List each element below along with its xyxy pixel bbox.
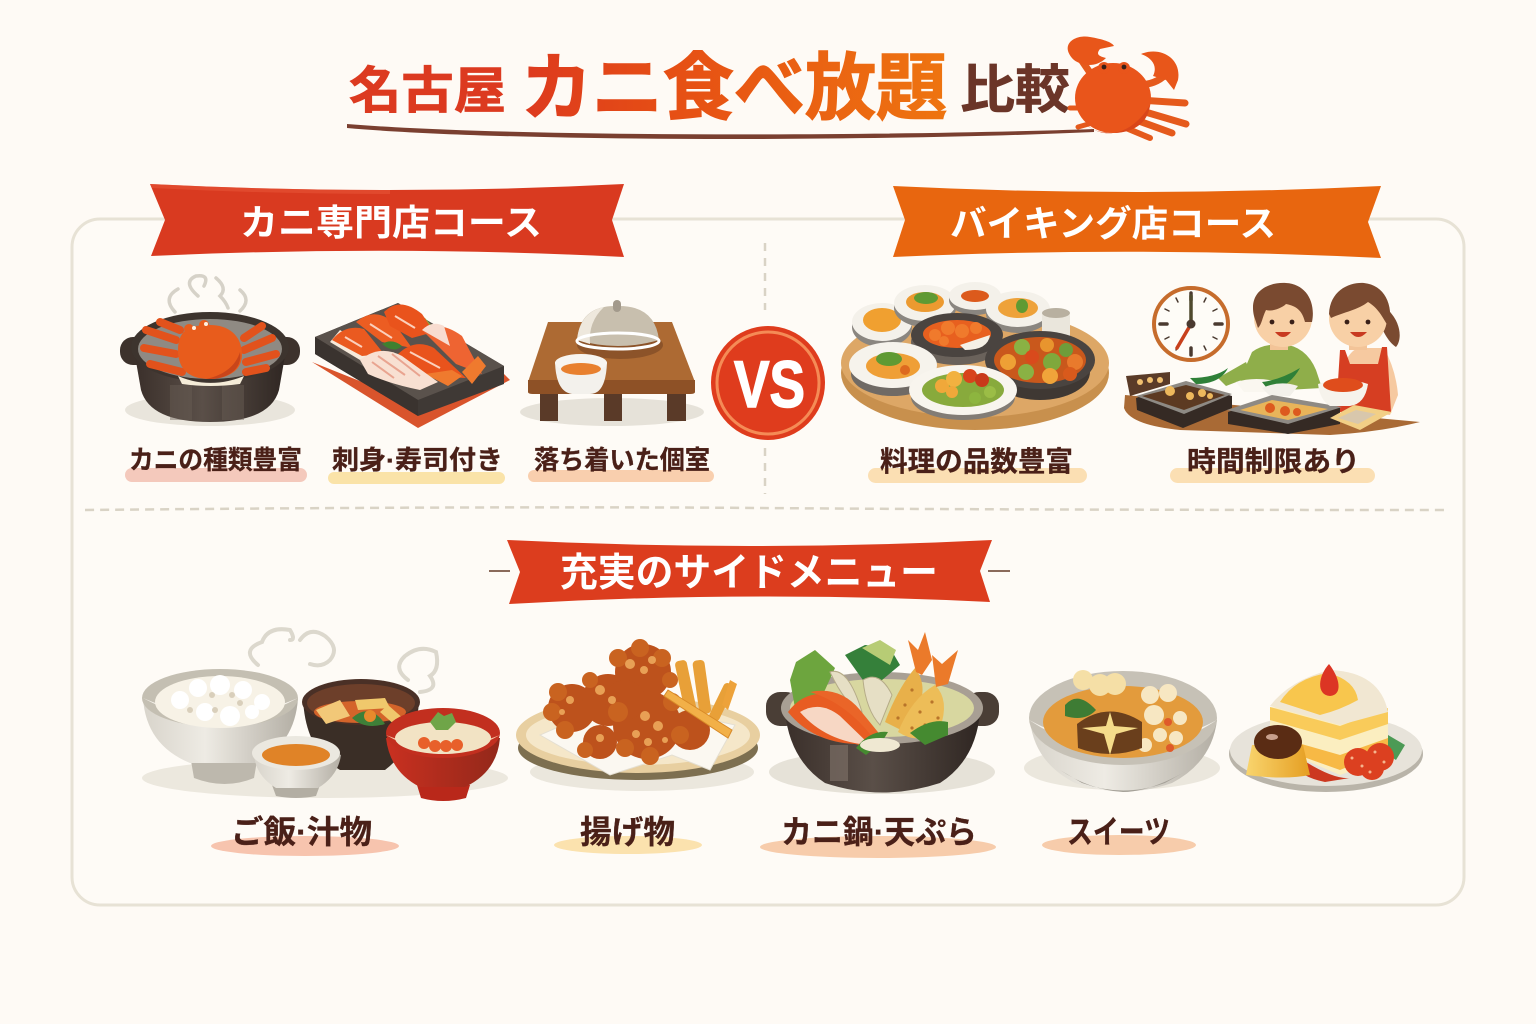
ribbon: buffet course bbox=[893, 186, 1381, 258]
icon: sashimi and sushi board bbox=[312, 303, 510, 428]
ribbon: crab specialty course bbox=[150, 184, 624, 257]
label: time limit: 時間制限あり bbox=[1187, 446, 1360, 477]
title: カニ食べ放題 bbox=[521, 48, 947, 129]
title bbox=[349, 48, 1070, 129]
ribbon: side menu bbox=[489, 540, 1010, 604]
ribbon: crab specialty course: カニ専門店コース bbox=[240, 202, 542, 243]
icon: two diners at buffet table bbox=[1124, 283, 1420, 435]
icon: wall clock bbox=[1154, 288, 1228, 360]
VS badge: VS bbox=[734, 347, 805, 421]
label: crab pot and tempura: カニ鍋·天ぷら bbox=[781, 814, 977, 850]
label: rice and soup: ご飯·汁物 bbox=[231, 814, 372, 850]
label: crab variety: カニの種類豊富 bbox=[129, 445, 302, 475]
label: sashimi sushi: 刺身·寿司付き bbox=[332, 445, 503, 475]
label: rice and soup bbox=[211, 814, 399, 856]
label: private room: 落ち着いた個室 bbox=[534, 445, 710, 475]
title: 名古屋 bbox=[349, 63, 506, 119]
icon: soup bowl with shiitake bbox=[1024, 670, 1220, 792]
icon: crab hot pot with tempura bbox=[766, 632, 999, 794]
ribbon: side menu: 充実のサイドメニュー bbox=[560, 552, 938, 595]
icon: buffet platter with many dishes bbox=[841, 282, 1109, 430]
comparison panel outline bbox=[72, 219, 1464, 905]
divider lines bbox=[85, 243, 1447, 510]
icon: crab hot pot bbox=[120, 276, 300, 426]
title underline bbox=[347, 124, 1094, 139]
label: sweets: スイーツ bbox=[1067, 814, 1170, 850]
label: fried food: 揚げ物 bbox=[580, 814, 675, 850]
VS badge bbox=[711, 326, 825, 440]
ribbon: buffet course: バイキング店コース bbox=[950, 203, 1276, 244]
icon: rice and soup set bbox=[142, 629, 508, 801]
label: many dishes: 料理の品数豊富 bbox=[880, 446, 1073, 477]
label: fried food bbox=[554, 814, 702, 854]
title: 比較 bbox=[960, 62, 1070, 120]
icon: title crab bbox=[1068, 36, 1186, 138]
label: time limit bbox=[1170, 446, 1375, 483]
icon: fried chicken plate bbox=[516, 639, 760, 791]
icon: private room table with cloche bbox=[520, 300, 704, 426]
icon: cake and pudding plate bbox=[1229, 664, 1423, 792]
